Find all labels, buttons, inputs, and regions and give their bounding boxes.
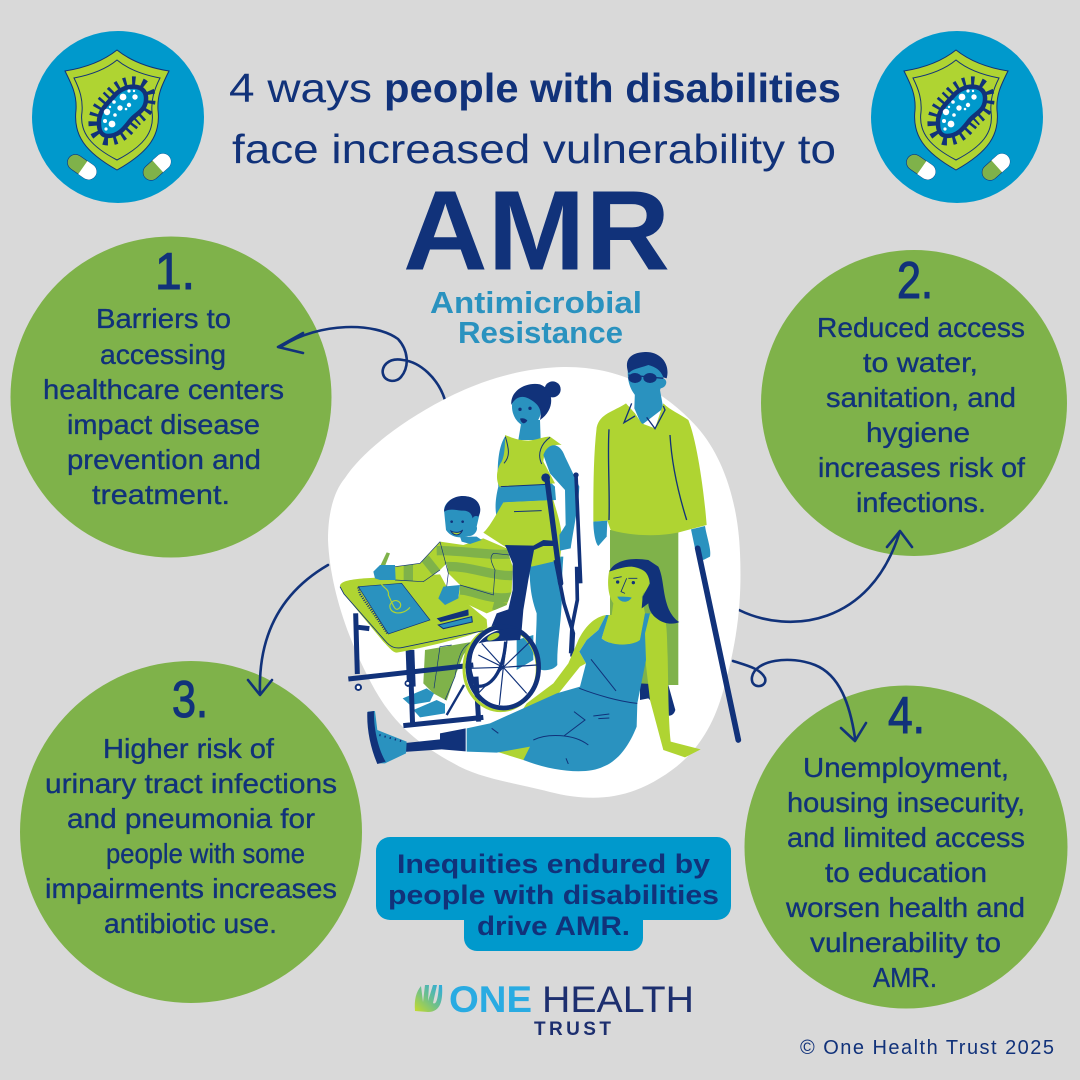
panel: way 2: infections. xyxy=(856,487,986,518)
panel: way 1: healthcare centers xyxy=(43,374,284,405)
panel: way 1: prevention and xyxy=(67,444,261,475)
title: 4 ways xyxy=(229,65,372,111)
panel: way 1 xyxy=(10,236,332,558)
head xyxy=(608,565,650,606)
heading: AMR: AMR xyxy=(403,168,670,294)
logo: One Health Trust: HEALTH xyxy=(542,979,694,1020)
panel: way 4: worsen health and xyxy=(785,892,1025,923)
desk xyxy=(340,574,487,653)
panel: way 3: people with some xyxy=(106,838,305,869)
icon: right shield badge xyxy=(871,31,1043,203)
title: people with disabilities xyxy=(384,65,841,111)
panel: way 1: treatment. xyxy=(92,479,230,510)
figure: man with cane xyxy=(593,352,738,740)
icon: left shield badge xyxy=(32,31,204,203)
prosthetic xyxy=(402,728,466,752)
panel: way 2: Reduced access xyxy=(817,312,1025,343)
subtitle: Antimicrobial Resistance xyxy=(430,285,642,350)
panel: way 3: Higher risk of xyxy=(103,733,274,764)
panel: way 4: to education xyxy=(825,857,987,888)
wheelchair frame xyxy=(348,613,483,727)
panel: way 1: impact disease xyxy=(67,409,260,440)
panel: way 4: and limited access xyxy=(787,822,1025,853)
title xyxy=(229,65,841,172)
panel: way 4: vulnerability to xyxy=(810,927,1001,958)
chest and neck xyxy=(602,597,645,645)
logo: One Health Trust: TRUST xyxy=(534,1019,611,1040)
panel: way 2: 2. xyxy=(897,252,933,310)
panel: way 1: 1. xyxy=(155,243,195,301)
panel: way 2: increases risk of xyxy=(818,452,1025,483)
subtitle: Antimicrobial Resistance: Resistance xyxy=(458,315,623,350)
arrow: to way 1 xyxy=(278,327,445,400)
hair xyxy=(609,559,679,624)
dress xyxy=(467,613,650,771)
crayons xyxy=(437,609,469,622)
callout: key message: Inequities endured by xyxy=(397,849,710,879)
panel: way 1: Barriers to xyxy=(96,303,231,334)
illustration: group of people with disabilities xyxy=(340,352,738,771)
wheelchair back xyxy=(490,540,557,630)
right arm xyxy=(640,613,701,757)
arrow: to way 4 xyxy=(733,660,866,741)
callout: key message xyxy=(376,837,731,951)
boy head xyxy=(444,496,482,544)
panel: way 2 xyxy=(761,250,1067,556)
striped sweater xyxy=(395,538,513,613)
subtitle: Antimicrobial Resistance: Antimicrobial xyxy=(430,285,642,320)
logo: One Health Trust: ONE xyxy=(449,979,532,1020)
panel: way 3: urinary tract infections xyxy=(45,768,337,799)
figure: seated woman with prosthetic leg xyxy=(367,559,701,771)
panel: way 1: accessing xyxy=(100,339,226,370)
panel: way 4 xyxy=(744,686,1068,1008)
copyright note: © One Health Trust 2025 xyxy=(800,1037,1054,1059)
panel: way 3: and pneumonia for xyxy=(67,803,315,834)
panel: way 4: AMR. xyxy=(873,962,937,993)
logo: One Health Trust xyxy=(415,979,694,1040)
callout: key message: drive AMR. xyxy=(477,911,630,941)
panel: way 2: to water, xyxy=(863,347,978,378)
shoes xyxy=(403,688,434,705)
arrow: to way 2 xyxy=(739,531,912,622)
white blob behind illustration xyxy=(328,367,740,798)
panel: way 3: 3. xyxy=(172,671,208,729)
figure: boy at desk in wheelchair xyxy=(340,538,557,727)
hands and pencil xyxy=(381,552,390,566)
panel: way 3 xyxy=(20,661,362,1003)
title: face increased vulnerability to xyxy=(232,126,836,172)
panel: way 4: 4. xyxy=(888,687,925,745)
wheel xyxy=(464,627,537,711)
panel: way 3: antibiotic use. xyxy=(104,908,277,939)
notebook xyxy=(358,583,430,634)
left arm xyxy=(519,615,606,725)
panel: way 4: Unemployment, xyxy=(803,752,1009,783)
figure: standing woman with crutches xyxy=(483,381,581,670)
legs xyxy=(423,642,473,701)
panel: way 3: impairments increases xyxy=(45,873,337,904)
shoe xyxy=(368,711,407,763)
panel: way 2: sanitation, and xyxy=(826,382,1016,413)
panel: way 4: housing insecurity, xyxy=(787,787,1025,818)
panel: way 2: hygiene xyxy=(866,417,970,448)
arrow: to way 3 xyxy=(248,565,328,695)
callout: key message: people with disabilities xyxy=(388,880,719,910)
